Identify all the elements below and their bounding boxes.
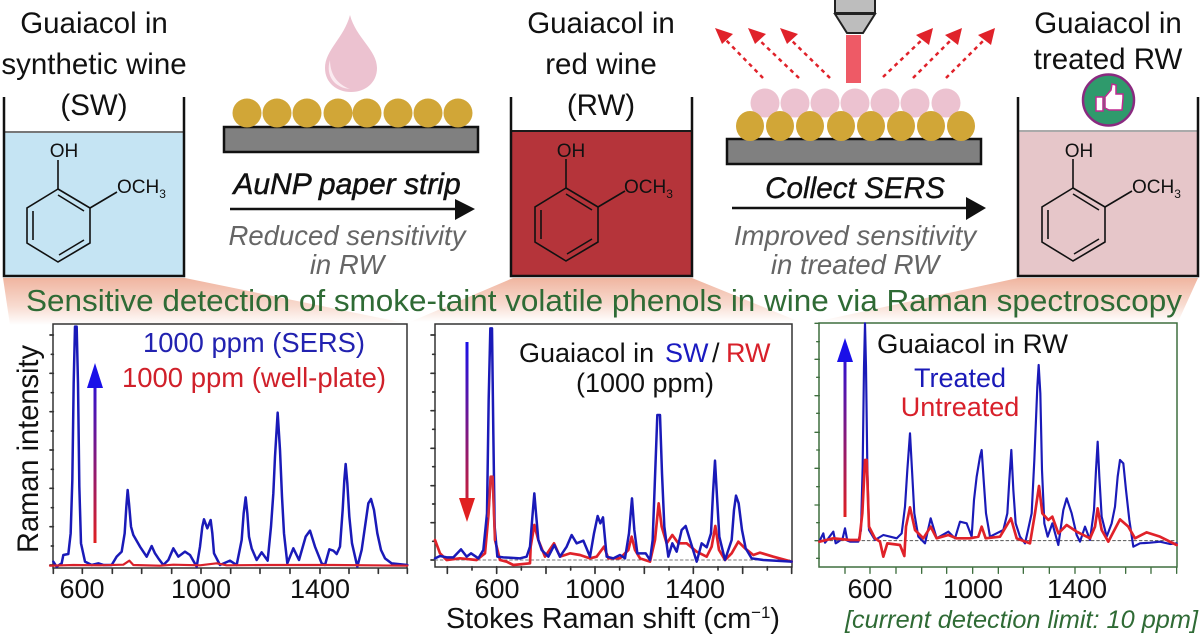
title: Sensitive detection of smoke-taint volatile phenols in wine via Raman spectroscopy [26, 283, 1183, 318]
molecule: guaiacol in treated RW [1042, 141, 1181, 261]
x-axis title: ) [770, 603, 780, 635]
molecule: guaiacol in RW: 3 [666, 187, 673, 201]
x-axis labels [847, 574, 1107, 604]
label: guaiacol in treated RW: treated RW [1034, 43, 1182, 76]
SERS substrate with adsorbed analyte [727, 88, 981, 164]
legend: SERS: 1000 ppm (SERS) [143, 327, 365, 358]
legend: well-plate: 1000 ppm (well-plate) [122, 362, 386, 393]
label: guaiacol in treated RW: Guaiacol in [1034, 7, 1182, 40]
chart: spectra 2 [431, 328, 792, 573]
label: guaiacol in red wine: (RW) [567, 89, 635, 122]
AuNP paper strip [224, 98, 478, 152]
legend: guaiacol in SW / RW: SW [665, 338, 709, 368]
arrow: collect SERS step: Improved sensitivity [734, 220, 978, 251]
x-axis labels: 1400 [1047, 574, 1107, 604]
arrow: AuNP paper strip step: Reduced sensitivity [229, 220, 468, 251]
arrow: AuNP paper strip step: in RW [310, 249, 387, 280]
legend: untreated: Untreated [901, 392, 1019, 422]
beaker: treated red wine [1018, 97, 1198, 276]
arrow: collect SERS step [732, 172, 986, 280]
label: guaiacol in synthetic wine [1, 7, 187, 122]
x-axis labels: 1400 [290, 574, 350, 604]
arrow: collect SERS step: Collect SERS [765, 172, 945, 205]
molecule: guaiacol in treated RW: 3 [1174, 187, 1181, 201]
label: guaiacol in red wine: red wine [545, 48, 657, 81]
arrow: signal increase [87, 363, 103, 543]
arrow: AuNP paper strip step: AuNP paper strip [231, 168, 461, 201]
arrow: collect SERS step: in treated RW [771, 249, 942, 280]
molecule: guaiacol in treated RW: OH [1065, 141, 1093, 162]
x-axis title: Stokes Raman shift (cm [446, 603, 754, 635]
x-axis labels: 600 [59, 574, 105, 604]
x-axis labels: 1000 [943, 574, 1003, 604]
molecule: guaiacol in RW: OH [557, 141, 585, 162]
molecule: guaiacol in RW: OCH [624, 177, 666, 198]
scattered light arrows [715, 28, 995, 78]
label: guaiacol in synthetic wine: synthetic wine [1, 48, 187, 81]
chart: spectra 3 [815, 323, 1177, 573]
legend: treated: Treated [914, 363, 1006, 393]
arrow: signal decrease [459, 342, 475, 522]
panel: treated vs untreated [815, 323, 1199, 634]
y-axis label: Raman intensity [12, 345, 45, 553]
panel: SERS vs well-plate [50, 324, 407, 604]
label: guaiacol in synthetic wine: Guaiacol in [20, 7, 168, 40]
beaker: red wine [511, 97, 692, 276]
footnote: detection limit: [current detection limit: 10 ppm] [844, 606, 1199, 634]
molecule: guaiacol in RW [535, 141, 673, 261]
label: guaiacol in synthetic wine: (SW) [60, 89, 128, 122]
x-axis labels [474, 574, 725, 604]
molecule: guaiacol in SW: 3 [159, 187, 166, 201]
molecule: guaiacol in SW [27, 141, 166, 262]
legend: guaiacol in SW / RW: RW [726, 338, 771, 368]
legend: guaiacol in SW / RW: Guaiacol in [519, 338, 654, 368]
molecule: guaiacol in treated RW: OCH [1132, 177, 1174, 198]
molecule: guaiacol in SW: OCH [117, 177, 159, 198]
molecule: guaiacol in SW: OH [50, 141, 78, 162]
chart: spectra 1 [50, 327, 407, 573]
legend: guaiacol in RW: Guaiacol in RW [877, 329, 1069, 359]
icon: pink droplet [325, 15, 377, 92]
icon: thumbs up [1083, 74, 1134, 126]
peach connector bands [3, 278, 1198, 325]
label: guaiacol in treated RW [1034, 7, 1182, 76]
x-axis labels: 1000 [565, 574, 625, 604]
legend: guaiacol in SW / RW: (1000 ppm) [576, 368, 714, 398]
label: guaiacol in red wine: Guaiacol in [527, 7, 675, 40]
x-axis title: −1 [751, 603, 770, 622]
arrow: AuNP paper strip step [229, 168, 475, 280]
x-axis labels: 1400 [665, 574, 725, 604]
beaker: synthetic wine [4, 97, 184, 276]
x-axis labels [59, 574, 350, 604]
x-axis labels: 600 [474, 574, 520, 604]
arrow: signal recovery [837, 338, 853, 517]
icon: laser objective and beam [835, 0, 875, 83]
label: guaiacol in red wine [527, 7, 675, 122]
panel: SW vs RW [431, 324, 792, 635]
legend: guaiacol in SW / RW [519, 338, 771, 398]
legend: guaiacol in SW / RW: / [712, 338, 720, 368]
x-axis labels: 1000 [171, 574, 231, 604]
x-axis labels: 600 [847, 574, 893, 604]
